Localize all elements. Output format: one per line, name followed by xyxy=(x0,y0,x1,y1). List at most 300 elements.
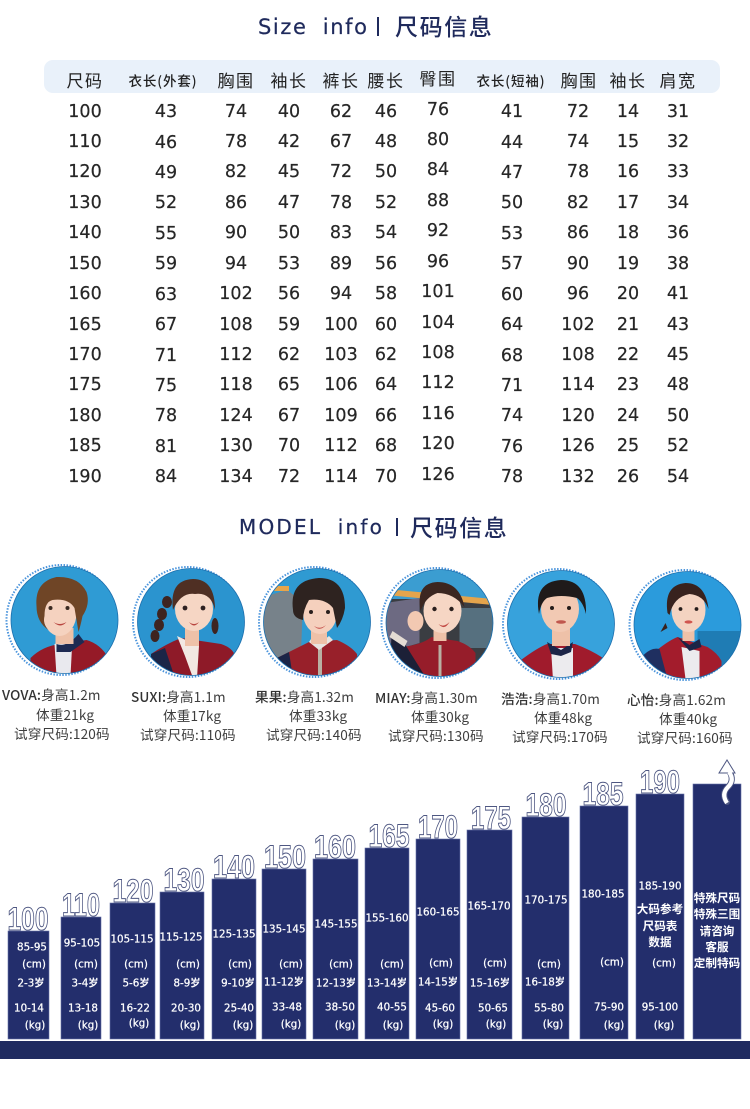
column: sleeve: 59 xyxy=(278,315,300,335)
column: trouser length: 83 xyxy=(330,223,352,243)
column: size: 130 xyxy=(68,193,102,213)
column: sleeve: 56 xyxy=(278,284,300,304)
column: short sleeve length 2: 25 xyxy=(617,436,639,456)
bar 110: 95-105 xyxy=(64,938,100,950)
bar special sizes: 特殊三围 xyxy=(694,906,740,922)
column: waist: 62 xyxy=(375,345,397,365)
caption: VOVA xyxy=(2,684,110,743)
column: hip: 120 xyxy=(421,434,455,454)
bar 130: 115-125 xyxy=(159,932,203,944)
caption: VOVA: VOVA:身高1.2m xyxy=(2,684,101,704)
column: hip: 104 xyxy=(421,313,455,333)
column: hip: 84 xyxy=(427,160,449,180)
column: waist: 50 xyxy=(375,162,397,182)
title: Size info: Size info xyxy=(258,15,369,39)
column: shoulder: 32 xyxy=(667,132,689,152)
title: MODEL info: 尺码信息 xyxy=(410,509,508,543)
column: hip: 76 xyxy=(427,100,449,120)
column: shoulder: 43 xyxy=(667,315,689,335)
column: hip: 88 xyxy=(427,191,449,211)
caption: MIAY xyxy=(375,687,484,745)
bar 185: (cm) xyxy=(600,956,624,968)
column: chest: 134 xyxy=(219,467,253,487)
caption: 果果: 体重33kg xyxy=(289,705,347,725)
bar 100: (kg) xyxy=(25,1020,45,1032)
bar 175: (kg) xyxy=(486,1018,506,1030)
bar 175: (cm) xyxy=(483,958,507,970)
column: short sleeve chest: 102 xyxy=(561,315,595,335)
table header band: 裤长 xyxy=(322,67,360,92)
title: Size info xyxy=(258,8,493,42)
table header band: 袖长 xyxy=(270,67,308,92)
bar 100: 85-95 xyxy=(17,942,47,954)
column: jacket length: 75 xyxy=(155,376,177,396)
column: short sleeve chest: 126 xyxy=(561,436,595,456)
bar 170: (kg) xyxy=(433,1018,453,1030)
bar 175 xyxy=(467,800,512,1039)
caption: 浩浩: 浩浩:身高1.70m xyxy=(501,688,600,708)
column: hip: 112 xyxy=(421,373,455,393)
caption: VOVA: 试穿尺码:120码 xyxy=(14,723,110,743)
title: MODEL info: MODEL info xyxy=(239,515,384,539)
column: short sleeve length: 53 xyxy=(501,224,523,244)
bar 170: 160-165 xyxy=(416,906,460,918)
bar 175: 15-16岁 xyxy=(470,976,510,990)
column: short sleeve length 2: 18 xyxy=(617,223,639,243)
column: sleeve: 50 xyxy=(278,223,300,243)
column: chest xyxy=(219,102,253,487)
portrait: 浩浩 xyxy=(503,569,615,684)
column: sleeve: 62 xyxy=(278,345,300,365)
column: short sleeve length: 57 xyxy=(501,254,523,274)
bar 190: 尺码表 xyxy=(643,918,678,934)
table header band: 尺码 xyxy=(66,67,104,92)
column: jacket length: 81 xyxy=(155,437,177,457)
column: jacket length: 78 xyxy=(155,406,177,426)
bar 120: 5-6岁 xyxy=(122,976,150,990)
column: sleeve: 47 xyxy=(278,193,300,213)
bar 170: 170 xyxy=(418,809,458,845)
bar 130: (cm) xyxy=(176,958,200,970)
column: sleeve: 67 xyxy=(278,406,300,426)
bar 160: (cm) xyxy=(329,958,353,970)
column: short sleeve length: 60 xyxy=(501,285,523,305)
column: shoulder: 54 xyxy=(667,467,689,487)
bar special sizes: 定制特码 xyxy=(694,955,741,971)
column: waist: 68 xyxy=(375,436,397,456)
column: short sleeve chest: 72 xyxy=(567,102,589,122)
column: chest: 90 xyxy=(225,223,247,243)
bar 190: 大码参考 xyxy=(637,901,683,917)
bar 120: 105-115 xyxy=(110,934,154,946)
caption: VOVA: 体重21kg xyxy=(36,704,94,724)
column: waist: 56 xyxy=(375,254,397,274)
column: short sleeve length 2: 15 xyxy=(617,132,639,152)
column: trouser length: 62 xyxy=(330,102,352,122)
bar special sizes: 请咨询 xyxy=(700,923,734,939)
caption: SUXI: 体重17kg xyxy=(163,705,221,725)
column: trouser length: 94 xyxy=(330,284,352,304)
caption: 心怡: 体重40kg xyxy=(659,708,717,728)
column: hip xyxy=(421,100,455,485)
column: short sleeve chest xyxy=(561,102,595,487)
column: short sleeve length: 68 xyxy=(501,346,523,366)
column: jacket length: 84 xyxy=(155,467,177,487)
column: chest: 118 xyxy=(219,375,253,395)
column: short sleeve length xyxy=(501,102,523,487)
table header band: 衣长(外套) xyxy=(128,70,198,90)
column: size: 110 xyxy=(68,132,102,152)
column: short sleeve length 2: 19 xyxy=(617,254,639,274)
table header band: 肩宽 xyxy=(660,67,696,92)
column: short sleeve length 2: 26 xyxy=(617,467,639,487)
bar 170: 45-60 xyxy=(425,1002,455,1014)
column: jacket length: 67 xyxy=(155,315,177,335)
column: short sleeve chest: 114 xyxy=(561,375,595,395)
bar 140: (kg) xyxy=(233,1020,253,1032)
caption: 果果: 果果:身高1.32m xyxy=(255,686,354,706)
bar 180: (cm) xyxy=(537,958,561,970)
column: short sleeve chest: 108 xyxy=(561,345,595,365)
bar 150: 11-12岁 xyxy=(264,976,304,988)
column: trouser length xyxy=(324,102,358,487)
column: jacket length: 63 xyxy=(155,285,177,305)
bar 185: 185 xyxy=(582,776,624,812)
bar 160: 12-13岁 xyxy=(316,976,356,990)
table header band: 腰长 xyxy=(368,67,404,92)
column: hip: 108 xyxy=(421,343,455,363)
bar 175: 165-170 xyxy=(467,900,511,912)
bar 160: 145-155 xyxy=(314,918,358,930)
column: shoulder: 33 xyxy=(667,162,689,182)
column: trouser length: 103 xyxy=(324,345,358,365)
column: chest: 94 xyxy=(225,254,247,274)
table header band: 臀围 xyxy=(420,65,456,90)
bar 160: 160 xyxy=(314,829,356,865)
bar 185: (kg) xyxy=(604,1020,624,1032)
column: waist: 52 xyxy=(375,193,397,213)
bar 120 xyxy=(110,873,155,1039)
column: waist: 60 xyxy=(375,315,397,335)
column: chest: 82 xyxy=(225,162,247,182)
column: short sleeve chest: 78 xyxy=(567,162,589,182)
column: short sleeve length: 44 xyxy=(501,133,523,153)
bar 110 xyxy=(61,887,101,1039)
bar 170: (cm) xyxy=(429,958,453,970)
bar 180 xyxy=(522,787,569,1039)
column: trouser length: 106 xyxy=(324,375,358,395)
column: chest: 102 xyxy=(219,284,253,304)
column: short sleeve chest: 120 xyxy=(561,406,595,426)
caption: 浩浩: 试穿尺码:170码 xyxy=(512,726,608,746)
caption: 浩浩 xyxy=(501,688,608,746)
column: short sleeve length 2: 23 xyxy=(617,375,639,395)
column: short sleeve length: 41 xyxy=(501,102,523,122)
bar 185: 180-185 xyxy=(581,888,625,900)
bar 130: (kg) xyxy=(180,1020,200,1032)
column: size: 140 xyxy=(68,223,102,243)
bar 175: 50-65 xyxy=(478,1002,508,1014)
column: trouser length: 109 xyxy=(324,406,358,426)
column: waist: 58 xyxy=(375,284,397,304)
bar 130: 130 xyxy=(164,862,204,898)
column: sleeve: 40 xyxy=(278,102,300,122)
column: short sleeve length: 50 xyxy=(501,193,523,213)
bar 190: 185-190 xyxy=(638,880,682,892)
bar 130: 20-30 xyxy=(171,1002,201,1014)
column: size: 165 xyxy=(68,315,102,335)
column: size: 175 xyxy=(68,375,102,395)
column: chest: 124 xyxy=(219,406,253,426)
bar 150: 135-145 xyxy=(262,924,306,936)
column: trouser length: 78 xyxy=(330,193,352,213)
column: waist: 48 xyxy=(375,132,397,152)
portrait: MIAY xyxy=(382,568,494,683)
column: short sleeve length: 74 xyxy=(501,406,523,426)
column: hip: 126 xyxy=(421,465,455,485)
bar special sizes xyxy=(693,784,741,1039)
bar 165: 40-55 xyxy=(377,1002,407,1014)
column: short sleeve length 2 xyxy=(617,102,639,487)
bar 165: 165 xyxy=(368,818,410,854)
bar 160: (kg) xyxy=(335,1020,355,1032)
column: chest: 112 xyxy=(219,345,253,365)
bar 185 xyxy=(580,776,628,1039)
caption: MIAY: 体重30kg xyxy=(411,706,469,726)
title: Size info: 尺码信息 xyxy=(395,8,493,42)
column: short sleeve length 2: 24 xyxy=(617,406,639,426)
bar 150: 150 xyxy=(264,839,306,875)
column: short sleeve chest: 86 xyxy=(567,223,589,243)
bar 100: 2-3岁 xyxy=(17,976,45,990)
column: waist: 66 xyxy=(375,406,397,426)
bar 130 xyxy=(159,862,204,1039)
table header band: 袖长 xyxy=(610,67,646,92)
bar 150 xyxy=(262,839,306,1039)
column: shoulder: 31 xyxy=(667,102,689,122)
portrait: 果果 xyxy=(259,567,371,682)
column: jacket length: 49 xyxy=(155,163,177,183)
bar 120: 16-22 xyxy=(120,1002,150,1014)
column: trouser length: 100 xyxy=(324,315,358,335)
column: jacket length: 46 xyxy=(155,133,177,153)
bar 140: 9-10岁 xyxy=(221,976,255,990)
caption: 心怡: 心怡:身高1.62m xyxy=(627,689,726,709)
bar 110: 13-18 xyxy=(68,1002,98,1014)
bar 180: 170-175 xyxy=(524,894,568,906)
column: size: 180 xyxy=(68,406,102,426)
bar 140: 25-40 xyxy=(224,1002,254,1014)
bar 165: (kg) xyxy=(383,1020,403,1032)
column: sleeve: 70 xyxy=(278,436,300,456)
column: waist: 70 xyxy=(375,467,397,487)
bar special sizes: 客服 xyxy=(705,939,729,955)
column: short sleeve length 2: 21 xyxy=(617,315,639,335)
column: hip: 101 xyxy=(421,282,455,302)
portrait: 心怡 xyxy=(630,570,742,685)
column: size: 160 xyxy=(68,284,102,304)
bar 120: 120 xyxy=(112,873,154,909)
bar 170: 14-15岁 xyxy=(418,976,458,988)
bar 185: 75-90 xyxy=(594,1002,624,1014)
panel: size table xyxy=(44,60,720,487)
column: trouser length: 72 xyxy=(330,162,352,182)
caption: SUXI: 试穿尺码:110码 xyxy=(140,724,236,744)
column: chest: 74 xyxy=(225,102,247,122)
column: waist xyxy=(375,102,397,487)
column: short sleeve chest: 96 xyxy=(567,284,589,304)
bar 180: 55-80 xyxy=(534,1002,564,1014)
bar 150: (kg) xyxy=(281,1018,301,1030)
caption: 果果 xyxy=(255,686,362,744)
bar 130: 8-9岁 xyxy=(173,976,201,990)
column: hip: 96 xyxy=(427,252,449,272)
column: jacket length: 71 xyxy=(155,346,177,366)
bar 140: (cm) xyxy=(228,958,252,970)
column: jacket length: 43 xyxy=(155,102,177,122)
bar 120: (kg) xyxy=(129,1018,149,1030)
bar 100 xyxy=(8,901,49,1039)
bar 110: (kg) xyxy=(78,1020,98,1032)
column: chest: 108 xyxy=(219,315,253,335)
column: trouser length: 114 xyxy=(324,467,358,487)
bar 150: 33-48 xyxy=(272,1002,302,1014)
bar 110: 3-4岁 xyxy=(71,976,99,990)
column: chest: 86 xyxy=(225,193,247,213)
column: short sleeve length 2: 20 xyxy=(617,284,639,304)
caption: MIAY: 试穿尺码:130码 xyxy=(388,725,484,745)
column: trouser length: 67 xyxy=(330,132,352,152)
column: short sleeve length: 64 xyxy=(501,315,523,335)
caption: MIAY: MIAY:身高1.30m xyxy=(375,687,478,707)
column: shoulder: 38 xyxy=(667,254,689,274)
bar 180: (kg) xyxy=(543,1018,563,1030)
column: short sleeve length 2: 14 xyxy=(617,102,639,122)
column: jacket length xyxy=(155,102,177,487)
bar 180: 16-18岁 xyxy=(525,976,565,988)
bar 190: 190 xyxy=(640,764,680,800)
bar 170 xyxy=(416,809,460,1039)
column: sleeve xyxy=(278,102,300,487)
caption: SUXI xyxy=(131,686,236,744)
column: sleeve: 72 xyxy=(278,467,300,487)
portrait: SUXI xyxy=(133,567,245,682)
column: shoulder: 45 xyxy=(667,345,689,365)
column: jacket length: 59 xyxy=(155,254,177,274)
column: trouser length: 89 xyxy=(330,254,352,274)
bar 190: (cm) xyxy=(652,958,676,970)
column: short sleeve chest: 74 xyxy=(567,132,589,152)
column: shoulder: 34 xyxy=(667,193,689,213)
column: sleeve: 65 xyxy=(278,375,300,395)
table header band: 胸围 xyxy=(218,67,254,92)
column: short sleeve chest: 82 xyxy=(567,193,589,213)
portrait: VOVA xyxy=(6,565,118,680)
table header band xyxy=(44,60,720,93)
bar 190: 95-100 xyxy=(642,1002,678,1014)
caption: SUXI: SUXI:身高1.1m xyxy=(131,686,226,706)
column: sleeve: 42 xyxy=(278,132,300,152)
table header band: 胸围 xyxy=(560,67,598,92)
column: chest: 130 xyxy=(219,436,253,456)
column: waist: 46 xyxy=(375,102,397,122)
bar special sizes: 特殊尺码 xyxy=(694,890,741,906)
column: size: 190 xyxy=(68,467,102,487)
column: short sleeve chest: 132 xyxy=(561,467,595,487)
column: waist: 64 xyxy=(375,375,397,395)
table header band: 衣长(短袖) xyxy=(476,70,546,90)
chart: height staircase xyxy=(0,759,750,1059)
column: sleeve: 53 xyxy=(278,254,300,274)
bar 190: 数据 xyxy=(648,934,672,950)
column: jacket length: 55 xyxy=(155,224,177,244)
column: short sleeve length: 47 xyxy=(501,163,523,183)
bar 140 xyxy=(212,849,256,1039)
bar 160: 38-50 xyxy=(325,1002,355,1014)
column: size: 185 xyxy=(68,436,102,456)
caption: 心怡: 试穿尺码:160码 xyxy=(637,727,733,747)
bar 165 xyxy=(365,818,410,1039)
column: sleeve: 45 xyxy=(278,162,300,182)
column: shoulder xyxy=(667,102,689,487)
column: size: 170 xyxy=(68,345,102,365)
bar 110: (cm) xyxy=(74,958,98,970)
bar 100: (cm) xyxy=(22,958,46,970)
caption: 心怡 xyxy=(627,689,733,747)
caption: 果果: 试穿尺码:140码 xyxy=(266,724,362,744)
bar 100: 10-14 xyxy=(14,1002,44,1014)
column: short sleeve chest: 90 xyxy=(567,254,589,274)
column: shoulder: 50 xyxy=(667,406,689,426)
column: size xyxy=(68,102,102,487)
bar 165: 13-14岁 xyxy=(367,976,407,990)
column: shoulder: 41 xyxy=(667,284,689,304)
title: MODEL info xyxy=(239,509,508,543)
column: shoulder: 36 xyxy=(667,223,689,243)
bar 140: 125-135 xyxy=(212,928,256,940)
bar 140: 140 xyxy=(213,849,255,885)
bar 160 xyxy=(313,829,358,1039)
column: shoulder: 48 xyxy=(667,375,689,395)
base band xyxy=(0,1041,750,1059)
column: trouser length: 112 xyxy=(324,436,358,456)
bar 110: 110 xyxy=(62,887,100,923)
column: short sleeve length: 78 xyxy=(501,467,523,487)
column: size: 150 xyxy=(68,254,102,274)
column: short sleeve length 2: 22 xyxy=(617,345,639,365)
bar 180: 180 xyxy=(526,787,566,823)
column: short sleeve length: 71 xyxy=(501,376,523,396)
icon: squiggle arrow xyxy=(719,760,735,803)
bar 120: (cm) xyxy=(124,958,148,970)
bar 165: (cm) xyxy=(380,958,404,970)
column: hip: 92 xyxy=(427,221,449,241)
panel: model portraits xyxy=(6,564,742,681)
column: short sleeve length 2: 17 xyxy=(617,193,639,213)
column: shoulder: 52 xyxy=(667,436,689,456)
bar 190 xyxy=(636,764,684,1039)
column: jacket length: 52 xyxy=(155,193,177,213)
bar 190: (kg) xyxy=(654,1020,674,1032)
caption: 浩浩: 体重48kg xyxy=(534,707,592,727)
bar 165: 155-160 xyxy=(365,912,409,924)
column: hip: 80 xyxy=(427,130,449,150)
column: waist: 54 xyxy=(375,223,397,243)
column: short sleeve length: 76 xyxy=(501,437,523,457)
column: chest: 78 xyxy=(225,132,247,152)
bar 150: (cm) xyxy=(279,958,303,970)
bar 175: 175 xyxy=(471,800,511,836)
